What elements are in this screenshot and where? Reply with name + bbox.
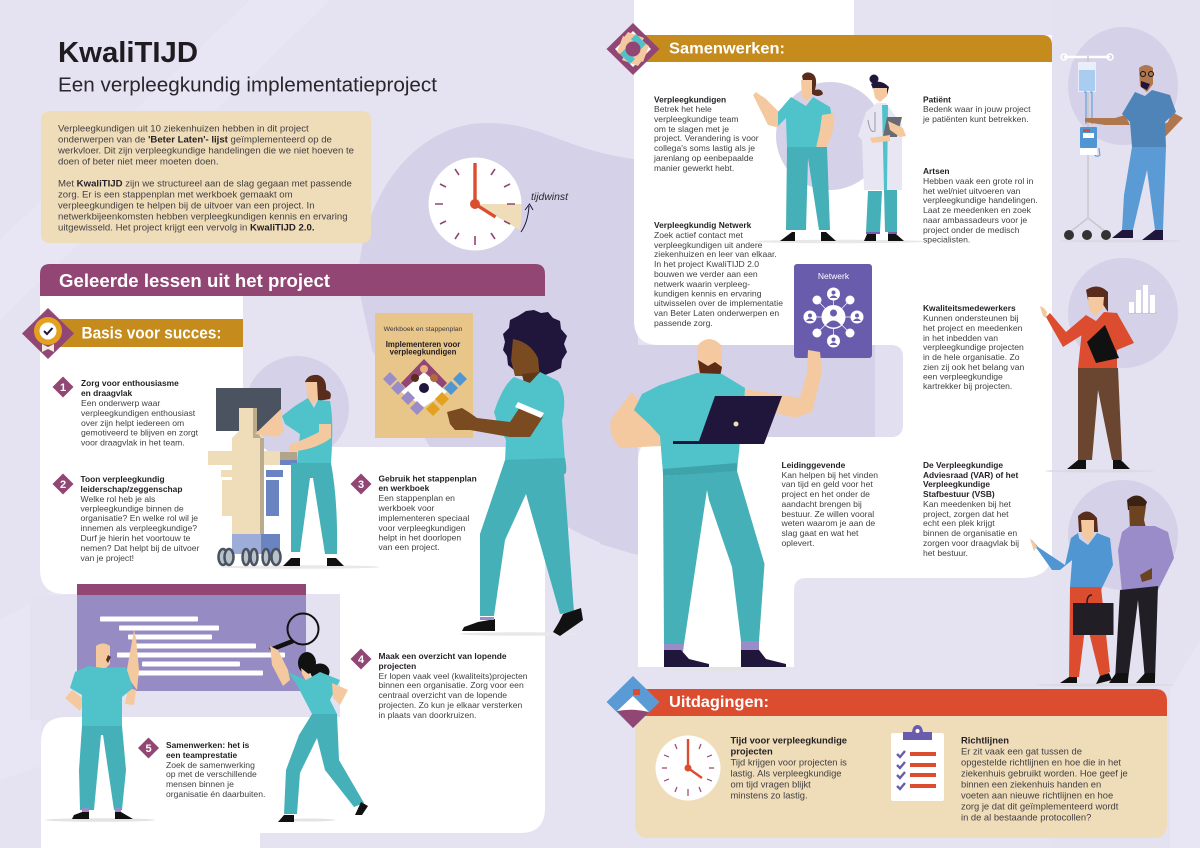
- subtitle: Een verpleegkundig implementatieproject: [58, 74, 437, 96]
- step 4: binnen een organisatie. Zorg voor een: [378, 680, 524, 690]
- illustration: quality officer: [1040, 258, 1178, 472]
- intro text: zorg. Er is een stappenplan met werkboek gemaakt om: [58, 190, 293, 200]
- text: Kwaliteitsmedewerkers: Kwaliteitsmedewerkers: [923, 303, 1016, 313]
- text: Artsen: verpleegkundige handelingen.: [923, 195, 1038, 205]
- illustration: project board: [77, 584, 306, 691]
- text: Kwaliteitsmedewerkers: in het inbedden van: [923, 333, 998, 343]
- text: Verpleegkundigen: jarenlang op eenbepaalde: [653, 153, 754, 163]
- text: Verpleegkundigen: verpleegkundige team: [654, 114, 739, 124]
- illustration: man with laptop: [610, 339, 822, 671]
- step 1: Zorg voor enthousiasme: [81, 378, 179, 388]
- heading: Uitdagingen: Uitdagingen:: [669, 694, 769, 711]
- text: Leidinggevende: bestuur. Ze willen vooral: [782, 509, 874, 519]
- illustration: nurse at ultrasound machine: [208, 356, 380, 569]
- text: Artsen: Hebben vaak een grote rol in: [923, 176, 1034, 186]
- text: Richtlijnen: [961, 734, 1128, 822]
- text: Kwaliteitsmedewerkers: kartrekker bij projecten.: [923, 381, 1012, 391]
- text: Leidinggevende: project en het onder de: [782, 489, 870, 499]
- text: Richtlijnen: opgestelde richtlijnen en hoe die in het: [961, 756, 1121, 768]
- text: Artsen: specialisten.: [923, 234, 970, 244]
- white panel: left lessons: [40, 296, 545, 848]
- illustration: nurse and doctor: [753, 72, 925, 243]
- step 4: Er lopen vaak veel (kwaliteits)projecten: [378, 671, 528, 681]
- text: Patiënt: [922, 94, 1031, 124]
- icon: clock: [656, 736, 720, 800]
- text: Leidinggevende: van tijd en geld voor het: [782, 479, 873, 489]
- text: Verpleegkundigen: om te slagen met je: [654, 124, 729, 134]
- illustration: patient with IV stand: [1060, 27, 1183, 242]
- text: Richtlijnen: zorg je dat dit geïmplementeerd wordt: [961, 800, 1119, 812]
- text: Leidinggevende: weten waarom je aan de: [780, 518, 875, 528]
- text: Verpleegkundig Netwerk: In het project KwaliTIJD 2.0: [654, 259, 759, 269]
- text: Verpleegkundig Netwerk: verpleegkundigen uit andere: [654, 240, 763, 250]
- step 2: leiderschap/zeggenschap: [80, 484, 182, 494]
- lavender panel behind board: [30, 595, 340, 742]
- text: Verpleegkundig Netwerk: [654, 220, 783, 328]
- illustration: tablet with network: Netwerk: [818, 271, 850, 281]
- text: Leidinggevende: oplevert.: [782, 538, 814, 548]
- step 4: Maak een overzicht van lopende: [378, 651, 507, 661]
- text: Verpleegkundigen: [653, 94, 759, 173]
- text: Verpleegkundig Netwerk: netwerk waarin verpleeg-: [654, 279, 750, 289]
- text: Kwaliteitsmedewerkers: in de hele organisatie. Zo: [923, 352, 1020, 362]
- intro text: Verpleegkundigen uit 10 ziekenhuizen hebben in dit project: [58, 124, 309, 134]
- text: Verpleegkundigen: Verpleegkundigen: [654, 94, 726, 104]
- text: Leidinggevende: slag gaat en wat het: [782, 528, 859, 538]
- text: Verpleegkundig Netwerk: Zoek actief contact met: [654, 230, 743, 240]
- step 5: een teamprestatie: [166, 750, 238, 760]
- text: Verpleegkundigen: project. Verandering is voor: [654, 133, 759, 143]
- intro text: Met KwaliTIJD zijn we structureel aan de slag gegaan met passende: [58, 178, 352, 190]
- text: Patiënt: je patiënten kunt betrekken.: [922, 114, 1029, 124]
- text: VAR / VSB: binnen de organisatie en: [923, 528, 1017, 538]
- step 3: Gebruik het stappenplan: [378, 474, 477, 484]
- text: VAR / VSB: zorgen voor draagvlak bij: [923, 538, 1019, 548]
- heading: Geleerde lessen: [40, 264, 545, 296]
- illustration: workbook cover: [375, 313, 473, 438]
- text: Leidinggevende: Leidinggevende: [782, 460, 846, 470]
- step 2: van je project!: [80, 553, 134, 563]
- step 1: over zijn helpt iedereen om: [81, 418, 184, 428]
- text: Verpleegkundig Netwerk: passende zorg.: [654, 318, 713, 328]
- text: Kwaliteitsmedewerkers: een verpleegkundige: [923, 372, 1003, 382]
- step 1: Een onderwerp waar: [81, 398, 160, 408]
- illustration: workbook cover: Implementeren voor: [386, 340, 460, 349]
- step 2: organisatie? En welke rol wil je: [80, 513, 198, 523]
- text: Verpleegkundigen: manier gewerkt hebt.: [654, 163, 734, 173]
- text: Verpleegkundigen: collega's soms lastig als je: [654, 143, 755, 153]
- text: Richtlijnen: ziekenhuis gebruikt worden. Hoe geef je: [961, 768, 1128, 778]
- intro text: doen of beter niet meer moeten doen.: [58, 156, 219, 168]
- step 3: helpt in het doorlopen: [378, 532, 461, 542]
- panel: introduction: [41, 111, 371, 243]
- text: Tijd: om tijd vragen blijkt: [730, 778, 811, 790]
- text: VAR / VSB: het bestuur.: [923, 548, 968, 558]
- step 1: verpleegkundigen enthousiast: [81, 408, 196, 418]
- step 2: Welke rol heb je als: [80, 494, 155, 504]
- step 4: [350, 648, 528, 720]
- intro text: verpleegkundigen te helpen bij de uitvoer van een project. In: [58, 200, 315, 212]
- text: Richtlijnen: in de al bestaande protocollen?: [961, 812, 1091, 822]
- text: Kwaliteitsmedewerkers: zien zij ook het belang van: [923, 362, 1025, 372]
- intro text: netwerkbijeenkomsten hebben verpleegkundigen kennis en ervaring: [58, 212, 348, 222]
- step 3: Een stappenplan en: [378, 493, 455, 503]
- step 2: Toon verpleegkundig: [80, 474, 165, 484]
- step 4: 4: [358, 654, 365, 666]
- text: Tijd: projecten: [730, 746, 773, 756]
- intro text: werkvloer. Dit zijn verpleegkundige handelingen die we niet hoeven te: [57, 146, 354, 156]
- text: VAR / VSB: Kan meedenken bij het: [923, 499, 1012, 509]
- step 2: Durf je hierin het voortouw te: [80, 533, 191, 543]
- text: Leidinggevende: aandacht brengen bij: [782, 499, 862, 509]
- step 1: 1: [60, 382, 66, 394]
- text: Leidinggevende: Kan helpen bij het vinden: [782, 470, 878, 480]
- text: Verpleegkundig Netwerk: uitwisselen over de implementatie: [654, 298, 783, 308]
- step 3: voor verpleegkundigen: [378, 523, 466, 533]
- white panel: samenwerken: [634, 0, 1052, 667]
- step 4: projecten: [378, 661, 416, 671]
- step 1: voor draagvlak in het team.: [81, 438, 185, 448]
- text: Verpleegkundigen: Betrek het hele: [654, 104, 712, 114]
- illustration: tablet with network: [794, 264, 872, 358]
- text: VAR / VSB: [923, 460, 1019, 558]
- step 1: gemotiveerd te blijven en zorgt: [81, 428, 199, 438]
- step 1: [52, 376, 199, 448]
- text: Artsen: naar ambassadeurs voor je: [923, 215, 1027, 225]
- heading: Basis voor succes: [22, 308, 243, 359]
- text: Tijd: Tijd voor verpleegkundige: [730, 734, 847, 746]
- text: Kwaliteitsmedewerkers: het project en meedenken: [923, 323, 1023, 333]
- text: Artsen: Laat ze meedenken en zoek: [923, 205, 1032, 215]
- step 3: en werkboek: [378, 483, 430, 493]
- step 1: en draagvlak: [81, 388, 133, 398]
- text: Artsen: project onder de medisch: [923, 225, 1020, 235]
- step 4: centraal overzicht van de lopende: [378, 690, 507, 700]
- step 2: 2: [60, 479, 66, 491]
- step 3: implementeren speciaal: [378, 513, 469, 523]
- text: VAR / VSB: De Verpleegkundige: [923, 460, 1003, 470]
- text: VAR / VSB: Adviesraad (VAR) of het: [923, 470, 1018, 480]
- text: Patiënt: Bedenk waar in jouw project: [923, 104, 1031, 114]
- step 2: verpleegkundige binnen de: [80, 504, 184, 514]
- text: Verpleegkundig Netwerk: Verpleegkundig Netwerk: [654, 220, 752, 230]
- text: Kwaliteitsmedewerkers: [923, 303, 1025, 391]
- step 5: [138, 738, 265, 799]
- text: Kwaliteitsmedewerkers: verpleegkundige projecten: [923, 342, 1024, 352]
- icon: clipboard: [891, 725, 944, 801]
- step 5: Samenwerken: het is: [166, 740, 250, 750]
- heading: Basis voor succes: Basis voor succes:: [82, 324, 222, 342]
- step 3: 3: [358, 479, 364, 491]
- step 5: Zoek de samenwerking: [166, 760, 255, 770]
- step 5: op met de verschillende: [166, 769, 257, 779]
- step 2: nemen? Dat helpt bij de uitvoer: [80, 543, 200, 553]
- text: VAR / VSB: echt een plek krijgt: [923, 518, 995, 528]
- text: Verpleegkundig Netwerk: van Beter Laten onderwerpen en: [654, 308, 779, 318]
- text: Richtlijnen: binnen een ziekenhuis handen en: [961, 778, 1101, 790]
- step 3: van een project.: [378, 542, 440, 552]
- text: VAR / VSB: project, zorgen dat het: [923, 509, 1009, 519]
- icon: joined hands: [606, 23, 660, 75]
- heading: Samenwerken: Samenwerken:: [669, 40, 785, 58]
- intro text: uitgewisseld. Het project krijgt een vervolg in KwaliTIJD 2.0.: [58, 222, 314, 234]
- illustration: workbook cover: Werkboek en stappenplan: [384, 326, 463, 333]
- icon: clock with time gain: tijdwinst: [531, 192, 569, 203]
- text: VAR / VSB: Stafbestuur (VSB): [923, 489, 995, 499]
- illustration: two colleagues: [1030, 480, 1178, 686]
- step 2: [52, 474, 200, 563]
- text: Tijd: lastig. Als verpleegkundige: [730, 768, 842, 778]
- step 5: 5: [145, 743, 152, 755]
- step 4: projecten. Zo kun je elkaar versterken: [378, 700, 522, 710]
- intro text: onderwerpen van de 'Beter Laten'- lijst geïmplementeerd op de: [58, 134, 332, 146]
- text: VAR / VSB: Verpleegkundige: [923, 479, 990, 489]
- text: Kwaliteitsmedewerkers: Kunnen ondersteunen bij: [923, 313, 1019, 323]
- illustration: workbook cover: verpleegkundigen: [390, 348, 457, 356]
- text: Artsen: Artsen: [923, 166, 950, 176]
- illustration: nurse holding workbook: [447, 310, 583, 636]
- text: Verpleegkundig Netwerk: ziekenhuizen en leer van elkaar.: [654, 249, 777, 259]
- text: Tijd: minstens zo lastig.: [730, 790, 808, 800]
- text: Artsen: het wel/niet uitvoeren van: [923, 186, 1021, 196]
- text: Tijd: Tijd krijgen voor projecten is: [730, 756, 847, 768]
- text: Verpleegkundig Netwerk: kundigen kennis en ervaring: [654, 288, 762, 298]
- step 5: organisatie én daarbuiten.: [166, 789, 265, 799]
- step 3: [350, 474, 477, 552]
- heading: Samenwerken: [606, 23, 1052, 75]
- title: KwaliTIJD: [58, 37, 198, 69]
- text: Richtlijnen: Richtlijnen: [961, 734, 1009, 746]
- heading: Geleerde lessen: Geleerde lessen uit het project: [59, 270, 330, 291]
- step 3: werkboek voor: [378, 503, 435, 513]
- text: Richtlijnen: Er zit vaak een gat tussen de: [961, 746, 1082, 756]
- icon: clock with time gain: [428, 158, 569, 250]
- illustration: man at board: [45, 630, 155, 822]
- text: Artsen: [923, 166, 1038, 244]
- text: Patiënt: Patiënt: [923, 94, 951, 104]
- step 2: innemen als verpleegkundige?: [80, 523, 197, 533]
- heading: Uitdagingen: [606, 676, 1167, 728]
- text: Richtlijnen: voeten aan nieuwe richtlijnen en hoe: [961, 790, 1113, 800]
- panel: Uitdagingen: [606, 676, 1167, 838]
- illustration: woman with magnifier: [270, 614, 368, 822]
- text: Tijd: [730, 734, 847, 800]
- step 4: in plaats van doorkruizen.: [378, 710, 476, 720]
- text: Verpleegkundig Netwerk: bouwen we verder aan een: [654, 269, 758, 279]
- step 5: mensen binnen je: [166, 779, 234, 789]
- text: Leidinggevende: [780, 460, 878, 548]
